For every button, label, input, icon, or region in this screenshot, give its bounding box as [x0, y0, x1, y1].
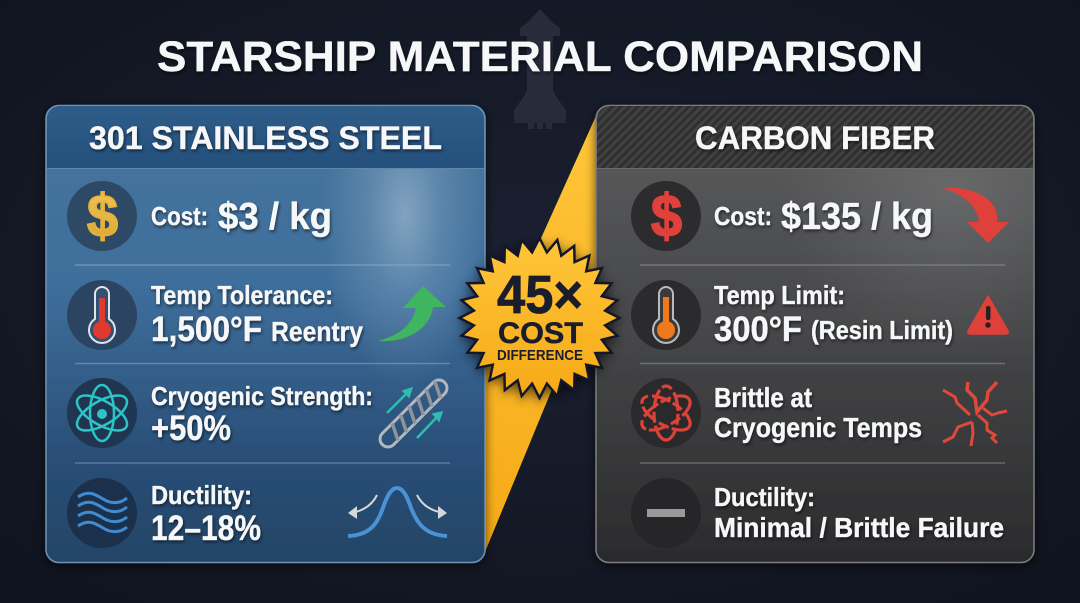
- heading: 301 STAINLESS STEEL: [89, 120, 442, 156]
- icon: rocket silhouette: [514, 9, 566, 129]
- temperature text: [714, 280, 953, 349]
- cost text: $3 / kg: [218, 196, 332, 238]
- row: temperature: [67, 280, 446, 350]
- icon: orange thermometer: [631, 280, 701, 350]
- icon: red down arrow: [943, 188, 1009, 243]
- row: cryogenic brittleness: [631, 378, 1007, 448]
- cryogenic text: +50%: [151, 409, 231, 448]
- temperature text: 1,500°F: [151, 310, 262, 349]
- icon: red dollar: [631, 181, 701, 251]
- panel header: [47, 106, 484, 168]
- icon: warning triangle: [968, 296, 1008, 334]
- cost text: [151, 196, 332, 238]
- icon: red cracks: [943, 382, 1007, 446]
- cost text: Cost:: [714, 201, 772, 231]
- panel header: [597, 106, 1033, 168]
- row: cost: [631, 181, 1009, 251]
- row: ductility: [631, 478, 1004, 548]
- cryogenic text: Cryogenic Strength:: [151, 381, 373, 411]
- panel background: [46, 106, 485, 562]
- cryogenic text: [151, 381, 373, 448]
- icon: red dollar: $: [651, 183, 682, 249]
- icon: waves: [67, 478, 137, 548]
- brittle text: [714, 382, 922, 443]
- ductility text: Ductility:: [714, 482, 815, 512]
- row: cryogenic strength: [67, 377, 450, 450]
- ductility text: 12–18%: [151, 509, 261, 548]
- temperature text: [151, 280, 363, 349]
- ductility text: Ductility:: [151, 480, 252, 510]
- panel: carbon fiber: [596, 106, 1034, 562]
- icon: green up arrow: [378, 286, 446, 341]
- icon: minus: [631, 478, 701, 548]
- brittle text: Brittle at: [714, 382, 812, 413]
- gold lightning band: [484, 116, 597, 552]
- ductility text: [151, 480, 261, 548]
- starburst: [460, 238, 620, 398]
- temperature text: (Resin Limit): [811, 315, 953, 345]
- panel highlight: [47, 168, 484, 448]
- row: ductility: [67, 478, 447, 548]
- brittle text: Cryogenic Temps: [714, 412, 922, 443]
- icon: ductility curve: [348, 488, 447, 536]
- temperature text: Temp Limit:: [714, 280, 845, 310]
- icon: gold dollar: [67, 181, 137, 251]
- badge text: DIFFERENCE: [497, 347, 583, 364]
- badge text: [497, 265, 583, 364]
- heading: CARBON FIBER: [695, 120, 935, 156]
- temperature text: Reentry: [271, 316, 363, 347]
- row: temperature: [631, 280, 1008, 350]
- temperature text: 300°F: [714, 310, 802, 349]
- title: STARSHIP MATERIAL COMPARISON: [157, 33, 923, 81]
- icon: gold dollar: $: [87, 183, 118, 249]
- badge text: 45×: [497, 265, 583, 325]
- cost text: $135 / kg: [781, 196, 933, 238]
- icon: teal atom: [67, 378, 137, 448]
- panel: 301 stainless steel: [46, 106, 485, 562]
- cost text: Cost:: [151, 201, 208, 231]
- icon: broken atom: [631, 378, 701, 448]
- temperature text: Temp Tolerance:: [151, 280, 333, 310]
- icon: steel rod with teal arrows: [377, 377, 450, 450]
- ductility text: [714, 482, 1004, 543]
- callout: 45x cost difference badge: [460, 238, 620, 398]
- panel highlight: [597, 168, 1033, 448]
- cost text: [714, 196, 933, 238]
- badge text: COST: [498, 317, 583, 350]
- icon: red thermometer: [67, 280, 137, 350]
- ductility text: Minimal / Brittle Failure: [714, 512, 1004, 543]
- row: cost: [67, 181, 332, 251]
- panel background: [596, 106, 1034, 562]
